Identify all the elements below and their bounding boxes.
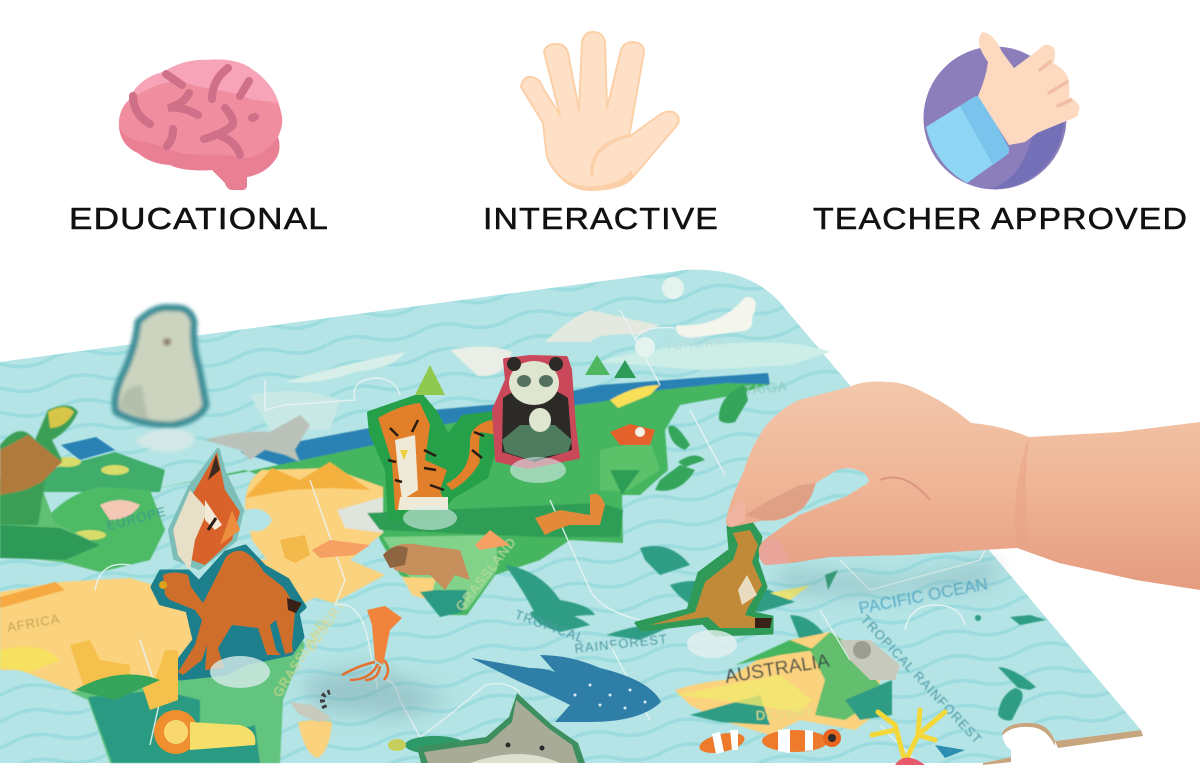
map labels: EUROPE <box>105 504 168 533</box>
shadows on board <box>300 560 1000 718</box>
heading: educational: EDUCATIONAL <box>69 202 329 236</box>
land: desert central asia <box>245 468 385 603</box>
animal: squid <box>342 606 402 680</box>
animal: desert cat <box>280 535 310 563</box>
clear stand: kangaroo <box>687 630 737 658</box>
map labels <box>6 334 989 747</box>
animal: polar bear <box>115 308 206 425</box>
clear stand: camel <box>210 656 270 688</box>
land: madagascar <box>298 720 332 758</box>
map labels: GRASSLAND <box>453 534 519 614</box>
animal: tiger <box>369 395 505 520</box>
land: africa <box>0 578 200 695</box>
icon: brain <box>119 59 282 190</box>
puzzle cut lines <box>95 310 985 765</box>
animal: camel <box>153 547 304 678</box>
heading: interactive: INTERACTIVE <box>483 202 719 236</box>
map labels: AUSTRALIA <box>723 651 831 688</box>
map labels: DESERT <box>755 705 815 723</box>
taiga river band <box>40 452 165 492</box>
trees in africa <box>75 674 160 700</box>
animal: panda <box>494 357 578 467</box>
icon: thumbs up badge <box>924 32 1080 190</box>
map labels: TROPICAL RAINFOREST <box>858 612 985 747</box>
clear stand: panda <box>510 457 566 483</box>
land: australia <box>675 632 880 735</box>
map labels: GRASSLAND <box>270 616 330 700</box>
animal: koala <box>840 640 900 680</box>
heading: teacher approved: TEACHER APPROVED <box>813 202 1188 236</box>
animal: bison <box>383 544 470 590</box>
icon: open hand <box>521 32 679 190</box>
small mountains <box>312 530 510 558</box>
land: arabia tip <box>252 555 333 605</box>
board edge <box>983 723 1143 765</box>
land: europe <box>38 487 165 572</box>
animal: turtle <box>388 736 465 754</box>
snowflakes <box>635 277 684 357</box>
animal: lion <box>154 710 255 754</box>
animal: monkey <box>535 494 605 535</box>
animal: shark card <box>417 693 585 763</box>
animal: lemur <box>290 692 332 722</box>
map labels: RAINFOREST <box>574 631 669 656</box>
map labels: AFRICA <box>6 611 61 635</box>
coral: blue and pink <box>895 745 965 765</box>
clear stand: tiger <box>403 506 457 530</box>
land: central and southern africa <box>70 635 305 763</box>
animal: wolf <box>205 415 310 462</box>
animal: red panda <box>610 424 655 445</box>
map labels: DESERT <box>303 597 348 654</box>
clear stand: polar bear <box>135 429 195 452</box>
animal: giraffes and gazelle <box>70 640 178 710</box>
land: south asia <box>383 535 497 610</box>
map labels: TAIGA <box>744 379 788 398</box>
map labels: TROPICAL <box>513 607 587 646</box>
coral <box>872 710 945 762</box>
animal: moose <box>0 405 78 525</box>
map labels: PACIFIC OCEAN <box>857 574 989 618</box>
arctic ice and snow <box>250 297 830 430</box>
animal: kangaroo <box>636 522 772 635</box>
panel: puzzle world map board <box>0 270 1143 765</box>
animal: clownfish <box>698 729 841 757</box>
animal: whale shark <box>471 655 661 722</box>
ocean surface <box>0 270 1141 763</box>
land: asia north <box>150 383 770 615</box>
map labels: TUNDRA <box>664 334 725 353</box>
animal: fox <box>170 450 242 570</box>
land: pacific islands <box>975 615 1046 720</box>
trees in asia <box>415 355 636 395</box>
land: north america edge <box>0 477 100 562</box>
land: southeast asia and islands <box>505 546 825 640</box>
child's hand <box>726 382 1200 590</box>
